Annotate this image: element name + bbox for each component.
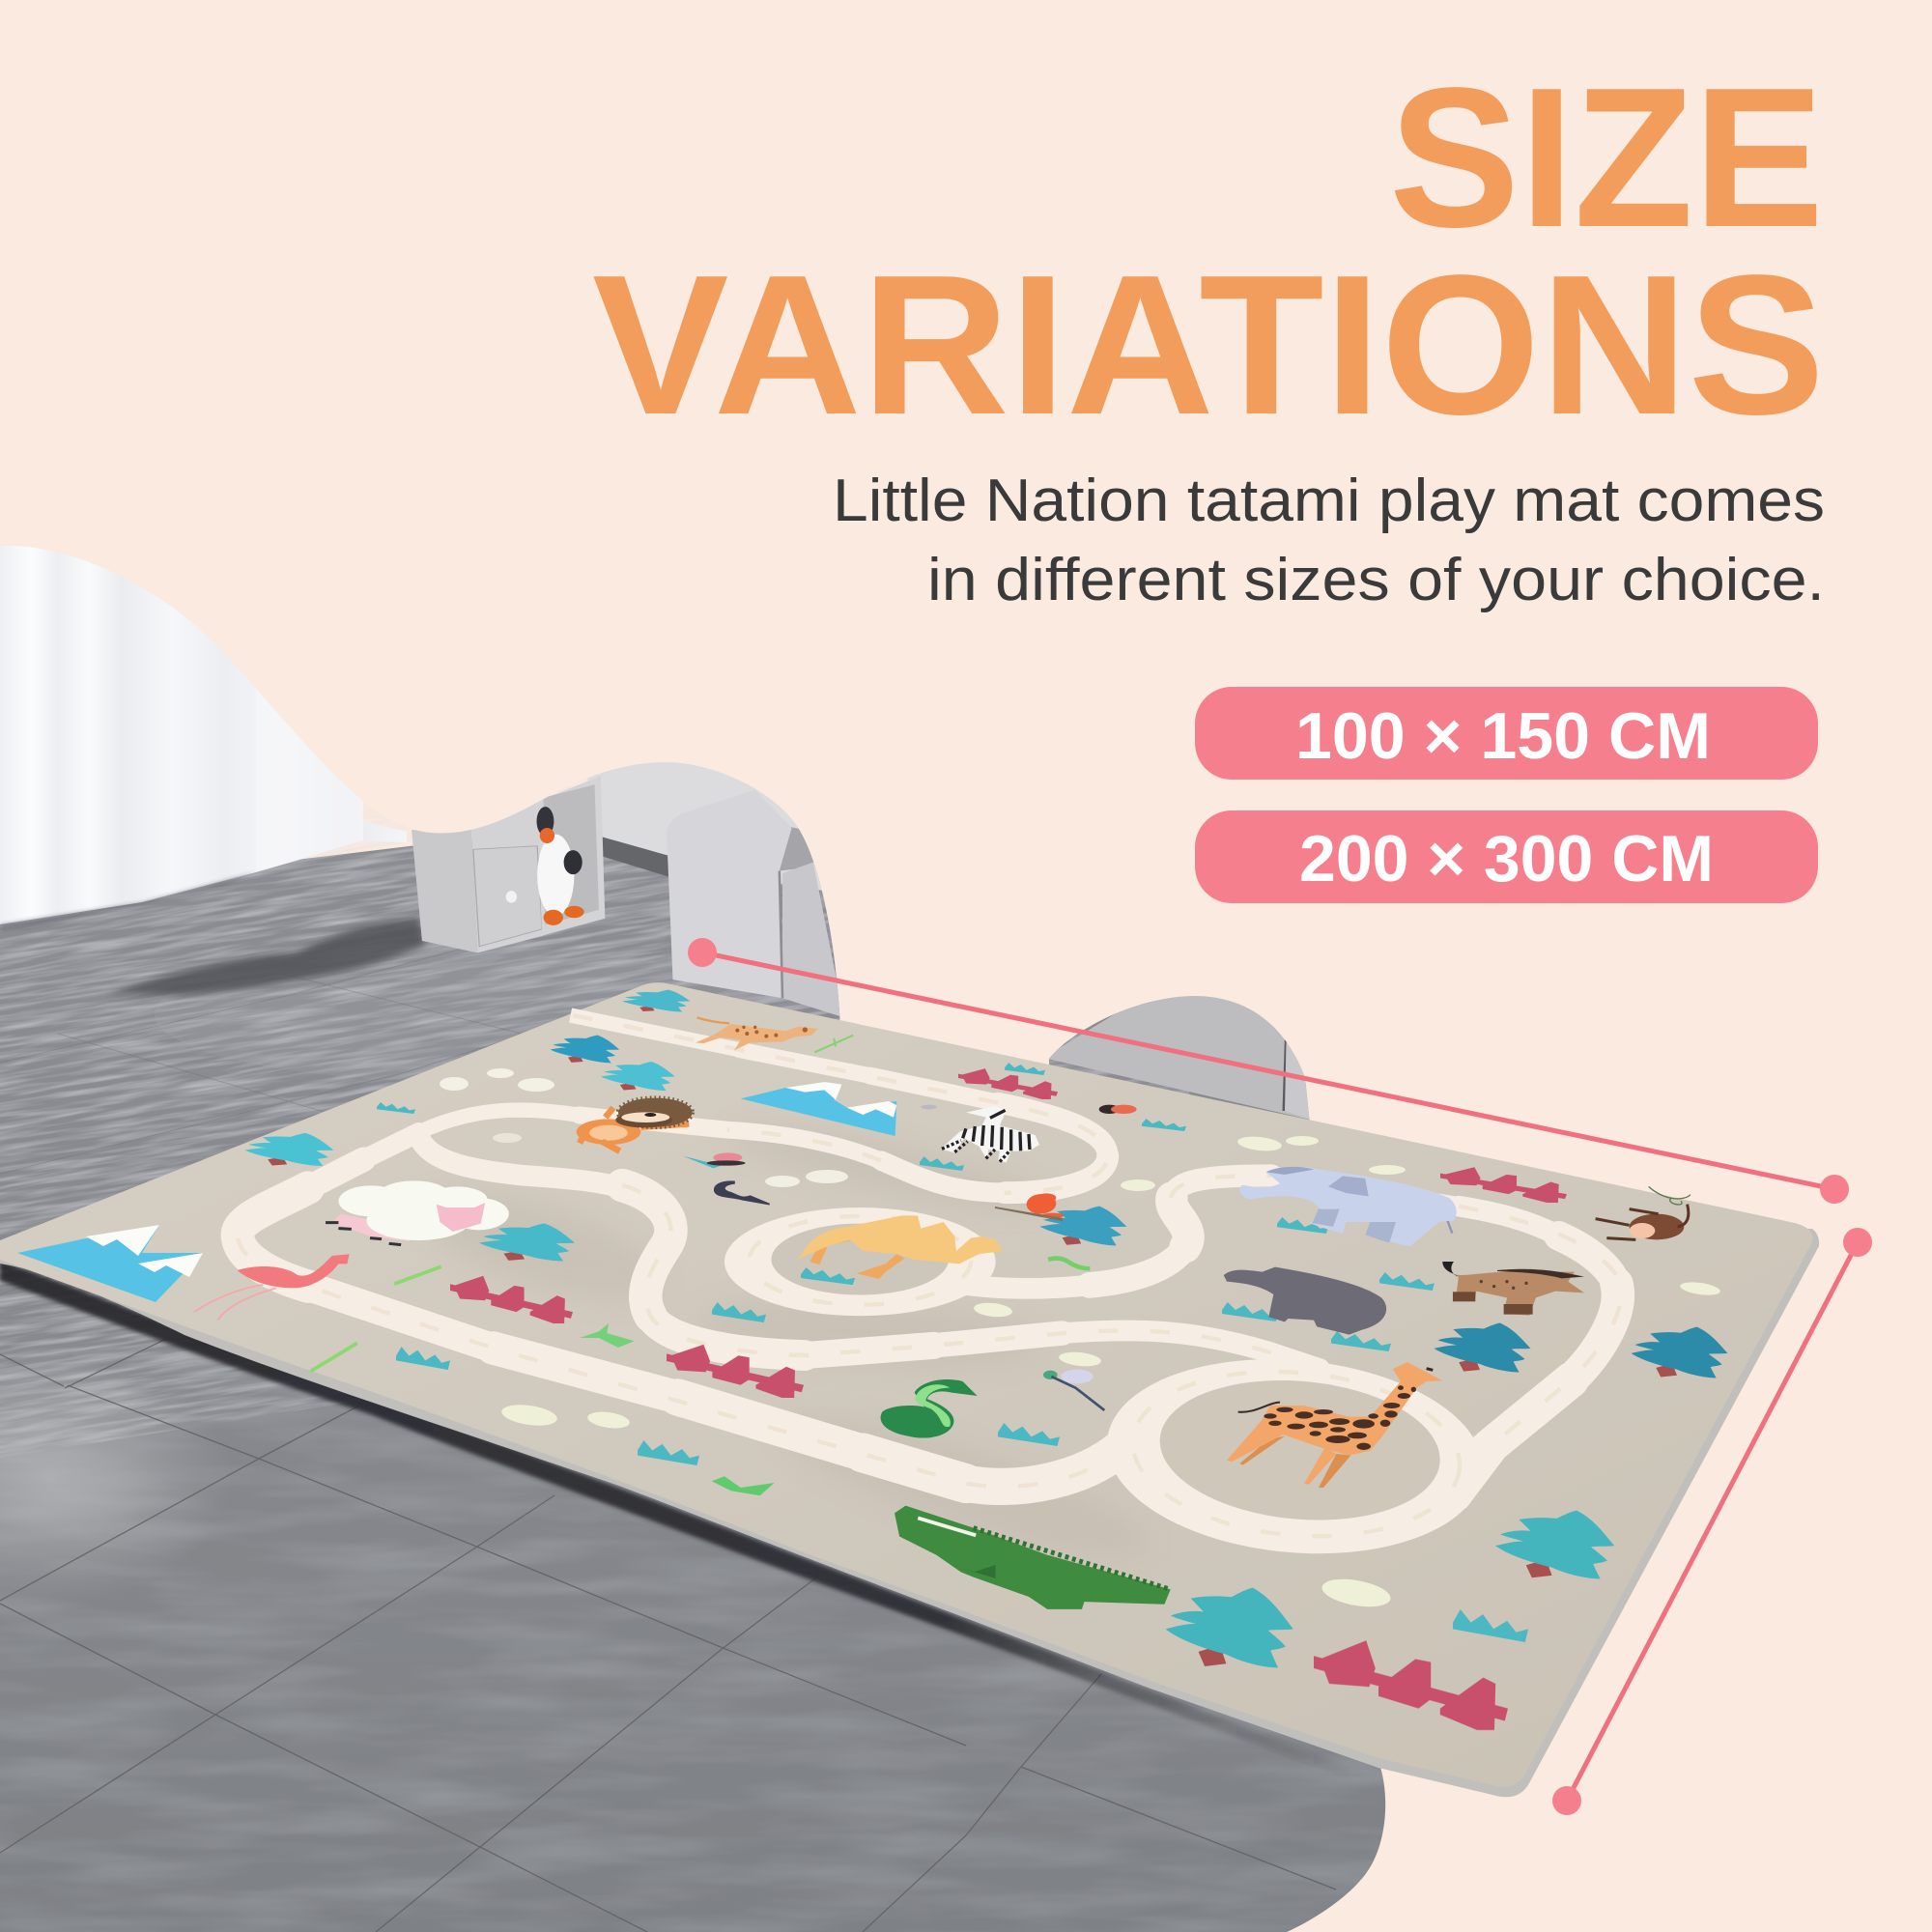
title: SIZE [1389, 46, 1824, 269]
size pill: 200 x 300 cm [1195, 810, 1818, 903]
size pill: 100 x 150 cm: 100 × 150 CM [1295, 699, 1711, 773]
tree [551, 1036, 619, 1063]
giraffe [1227, 1362, 1442, 1488]
description [833, 468, 1825, 613]
grass tufts [377, 1063, 1528, 1642]
insect [921, 1105, 937, 1109]
mat inner shading [409, 1112, 1162, 1584]
floor shadow [109, 918, 425, 995]
mat shadow [0, 1261, 1352, 1779]
lion [577, 1098, 693, 1151]
tree [1039, 1207, 1126, 1245]
dot [688, 938, 717, 967]
crocodile [895, 1506, 1171, 1609]
description: in different sizes of your choice. [927, 547, 1825, 613]
zebra [941, 1106, 1039, 1162]
caterpillar [1048, 1258, 1090, 1268]
bird body [1027, 1194, 1056, 1213]
dot [1552, 1786, 1581, 1815]
scorpion [715, 1181, 770, 1205]
description: Little Nation tatami play mat comes [833, 468, 1825, 534]
flamingo [194, 1254, 350, 1321]
sheep [326, 1180, 509, 1245]
leopard [696, 1017, 818, 1050]
twig [814, 1036, 853, 1052]
wall [587, 762, 822, 891]
monkey [1596, 1186, 1690, 1239]
dot [1843, 1228, 1872, 1257]
play mat [0, 982, 1819, 1797]
elephant [1239, 1167, 1457, 1246]
penguin toy [537, 807, 584, 925]
storage cabinet [412, 776, 605, 952]
hills [440, 1068, 1721, 1611]
red fences [450, 1068, 1567, 1730]
animals center [995, 1105, 1137, 1410]
bird [995, 1193, 1064, 1220]
sofa right seat [1043, 990, 1314, 1121]
tree [1495, 1511, 1614, 1578]
length measure line [1552, 1228, 1872, 1815]
butterfly [683, 1152, 746, 1168]
snake [881, 1379, 978, 1438]
tree [245, 1133, 333, 1166]
title: VARIATIONS [592, 234, 1825, 456]
twig lower [310, 1266, 441, 1372]
small butterfly [1099, 1105, 1137, 1114]
roads [238, 1015, 1621, 1569]
animals back [577, 1017, 1064, 1495]
trees [245, 990, 1727, 1667]
camel [796, 1215, 1003, 1279]
tree [1434, 1323, 1530, 1372]
camel road ring [724, 1208, 996, 1316]
room photo [0, 536, 1449, 1932]
giraffe road ring [1098, 1345, 1492, 1569]
animals right [1224, 1167, 1690, 1488]
curtain [0, 536, 407, 933]
tree [1631, 1327, 1727, 1378]
title [592, 46, 1825, 456]
bottom animals [310, 1266, 1171, 1609]
sofa left arm [668, 827, 840, 1016]
baseboard [603, 837, 668, 877]
size pill: 200 x 300 cm: 200 × 300 CM [1299, 822, 1714, 895]
warthog [1442, 1262, 1584, 1316]
tree [601, 1062, 675, 1091]
size pill: 100 x 150 cm [1195, 687, 1818, 780]
back tree bird branch [995, 1208, 1063, 1219]
width measure line [688, 938, 1849, 1204]
camel ground grass [802, 1268, 855, 1285]
dragonfly [1043, 1370, 1104, 1410]
mountain left [17, 1225, 203, 1302]
grasshopper lower [712, 1476, 775, 1495]
grasshopper [580, 1323, 635, 1348]
tree [479, 1223, 575, 1262]
mat side rim [0, 1229, 1819, 1797]
dot [1820, 1175, 1849, 1204]
tree [622, 990, 691, 1011]
seat gap [1284, 1019, 1287, 1111]
rhino [1224, 1267, 1386, 1335]
mat surface [0, 982, 1813, 1787]
mountains [17, 1082, 896, 1302]
floor [0, 787, 1385, 1932]
mountain back [741, 1082, 896, 1136]
tree [1165, 1588, 1293, 1667]
